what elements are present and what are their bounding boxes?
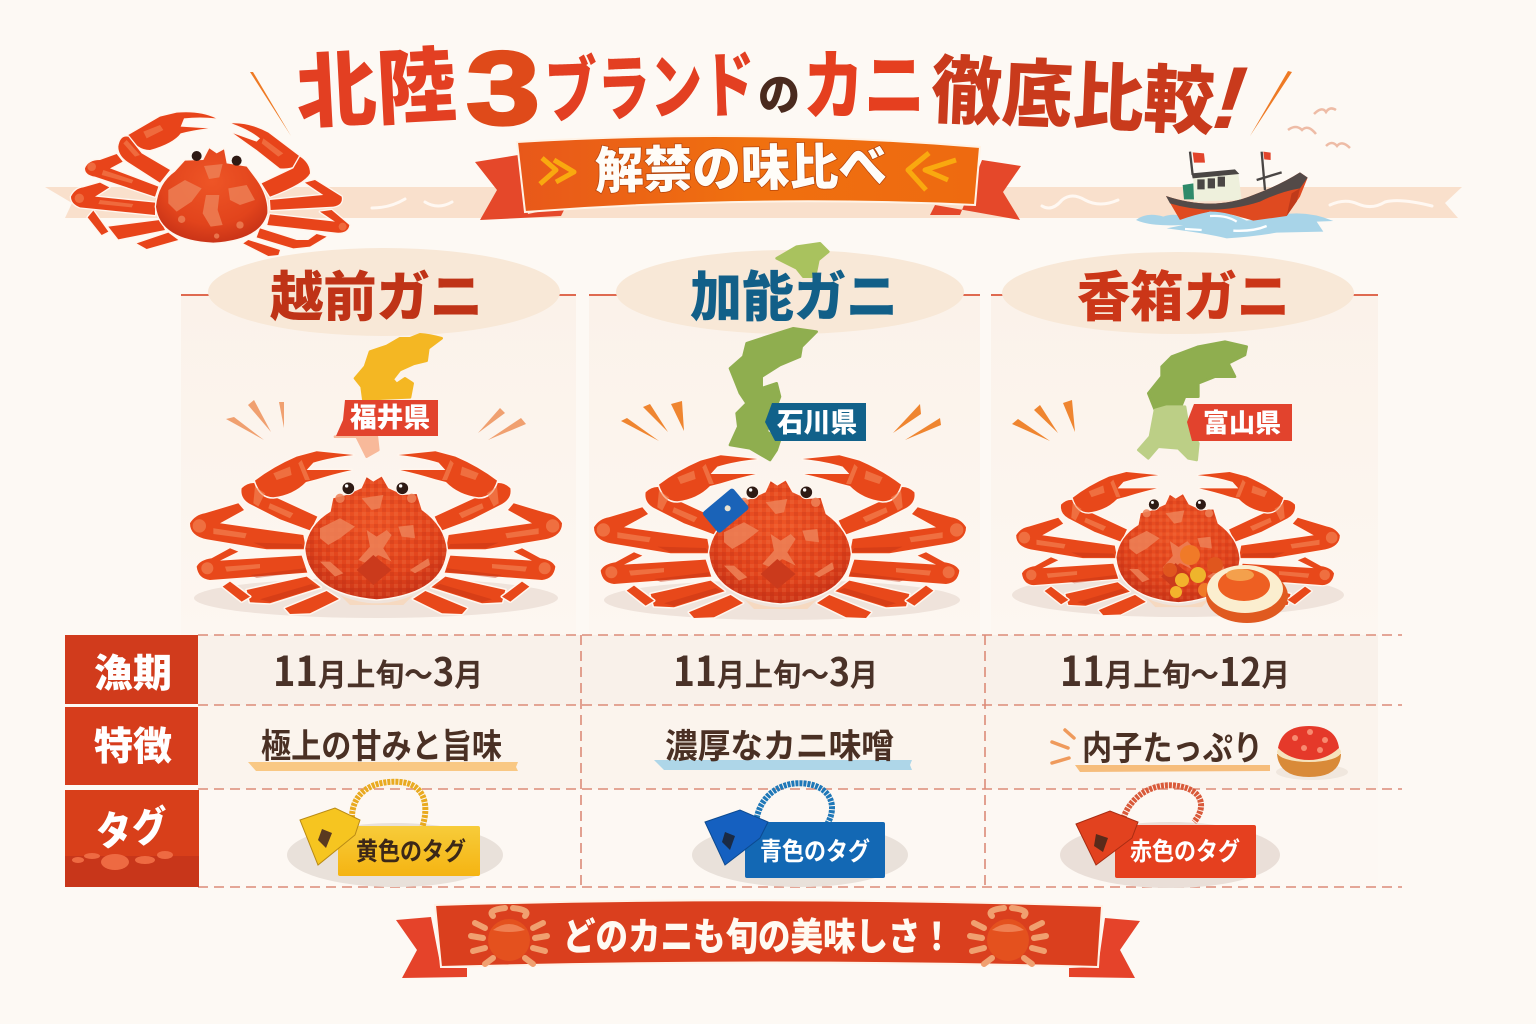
name pill (1002, 252, 1354, 334)
table lines (198, 635, 1402, 887)
ribbon arrows (540, 153, 956, 190)
row header: 漁期 (65, 635, 198, 704)
tag: yellow: 黄色のタグ (356, 832, 466, 868)
prefecture label: 富山県 (1203, 403, 1281, 440)
tag: yellow (287, 782, 503, 887)
roe on crab (1163, 545, 1223, 598)
title: ! (1199, 49, 1263, 148)
crab (1016, 472, 1340, 615)
map: Ishikawa (730, 328, 817, 460)
peach wave band (45, 187, 1462, 218)
brand name: 加能ガニ (690, 253, 898, 332)
accent sparks (226, 400, 526, 440)
name pill (208, 248, 560, 336)
row header: 特徴 (65, 707, 198, 785)
tag: red: 赤色のタグ (1130, 832, 1240, 868)
title: ブランド (543, 26, 757, 138)
small crab right (970, 908, 1046, 964)
row header: 特徴: 特徴 (94, 716, 172, 772)
title: 北陸 (293, 19, 459, 146)
tag: blue (692, 783, 908, 887)
title: の (758, 59, 800, 123)
row header: タグ: タグ (93, 793, 171, 858)
bottom ribbon text: どのカニも旬の美味しさ！ (563, 906, 953, 961)
title: 徹底比較 (929, 31, 1217, 150)
season values: 11月上旬～3月 (273, 638, 483, 698)
tag: blue: 青色のタグ (760, 832, 870, 868)
table background (198, 635, 1378, 887)
panel: 越前ガニ (181, 248, 576, 635)
title: カニ (803, 25, 925, 135)
feature: 濃厚なカニ味噌: 濃厚なカニ味噌 (665, 719, 894, 768)
prefecture label: 福井県 (350, 396, 430, 435)
season values: 11月上旬～3月 (673, 638, 878, 698)
title: 3 (466, 31, 540, 147)
crab (190, 451, 562, 614)
feature: 内子たっぷり: 内子たっぷり (1082, 721, 1263, 770)
tag: red (1060, 785, 1280, 888)
crab shadow (604, 580, 960, 620)
panel: 加能ガニ (589, 243, 980, 635)
roe dish (1206, 565, 1288, 623)
header crab (71, 112, 349, 256)
row header: タグ (65, 790, 199, 887)
map top (777, 243, 828, 277)
brand name: 越前ガニ (270, 253, 483, 332)
birds (1288, 108, 1350, 148)
feature: 極上の甘みと旨味: 極上の甘みと旨味 (261, 719, 502, 768)
title accent strokes (250, 71, 1292, 136)
row header: 漁期: 漁期 (94, 643, 172, 699)
prefecture label: 石川県 (777, 401, 857, 440)
bottom ribbon (396, 900, 1140, 978)
crab shadow (194, 578, 558, 618)
brand name: 香箱ガニ (1077, 253, 1290, 332)
icon: roe bowl (1276, 726, 1348, 780)
blue leg tag (702, 487, 750, 534)
title (293, 19, 1263, 150)
season values: 11月上旬～12月 (1060, 638, 1290, 698)
name pill (616, 250, 964, 334)
map: Toyama (1138, 342, 1247, 460)
season values (273, 638, 1290, 698)
accent sparks (1012, 400, 1075, 441)
fishing boat (1136, 152, 1333, 238)
crab shadow (1012, 573, 1344, 617)
top ribbon (475, 126, 1021, 220)
map: Fukui (335, 334, 442, 457)
small crab left (471, 908, 547, 964)
panel: 香箱ガニ (991, 252, 1378, 635)
crab (594, 455, 966, 618)
accent sparks (621, 401, 941, 441)
ribbon text: 解禁の味比べ (594, 126, 888, 204)
